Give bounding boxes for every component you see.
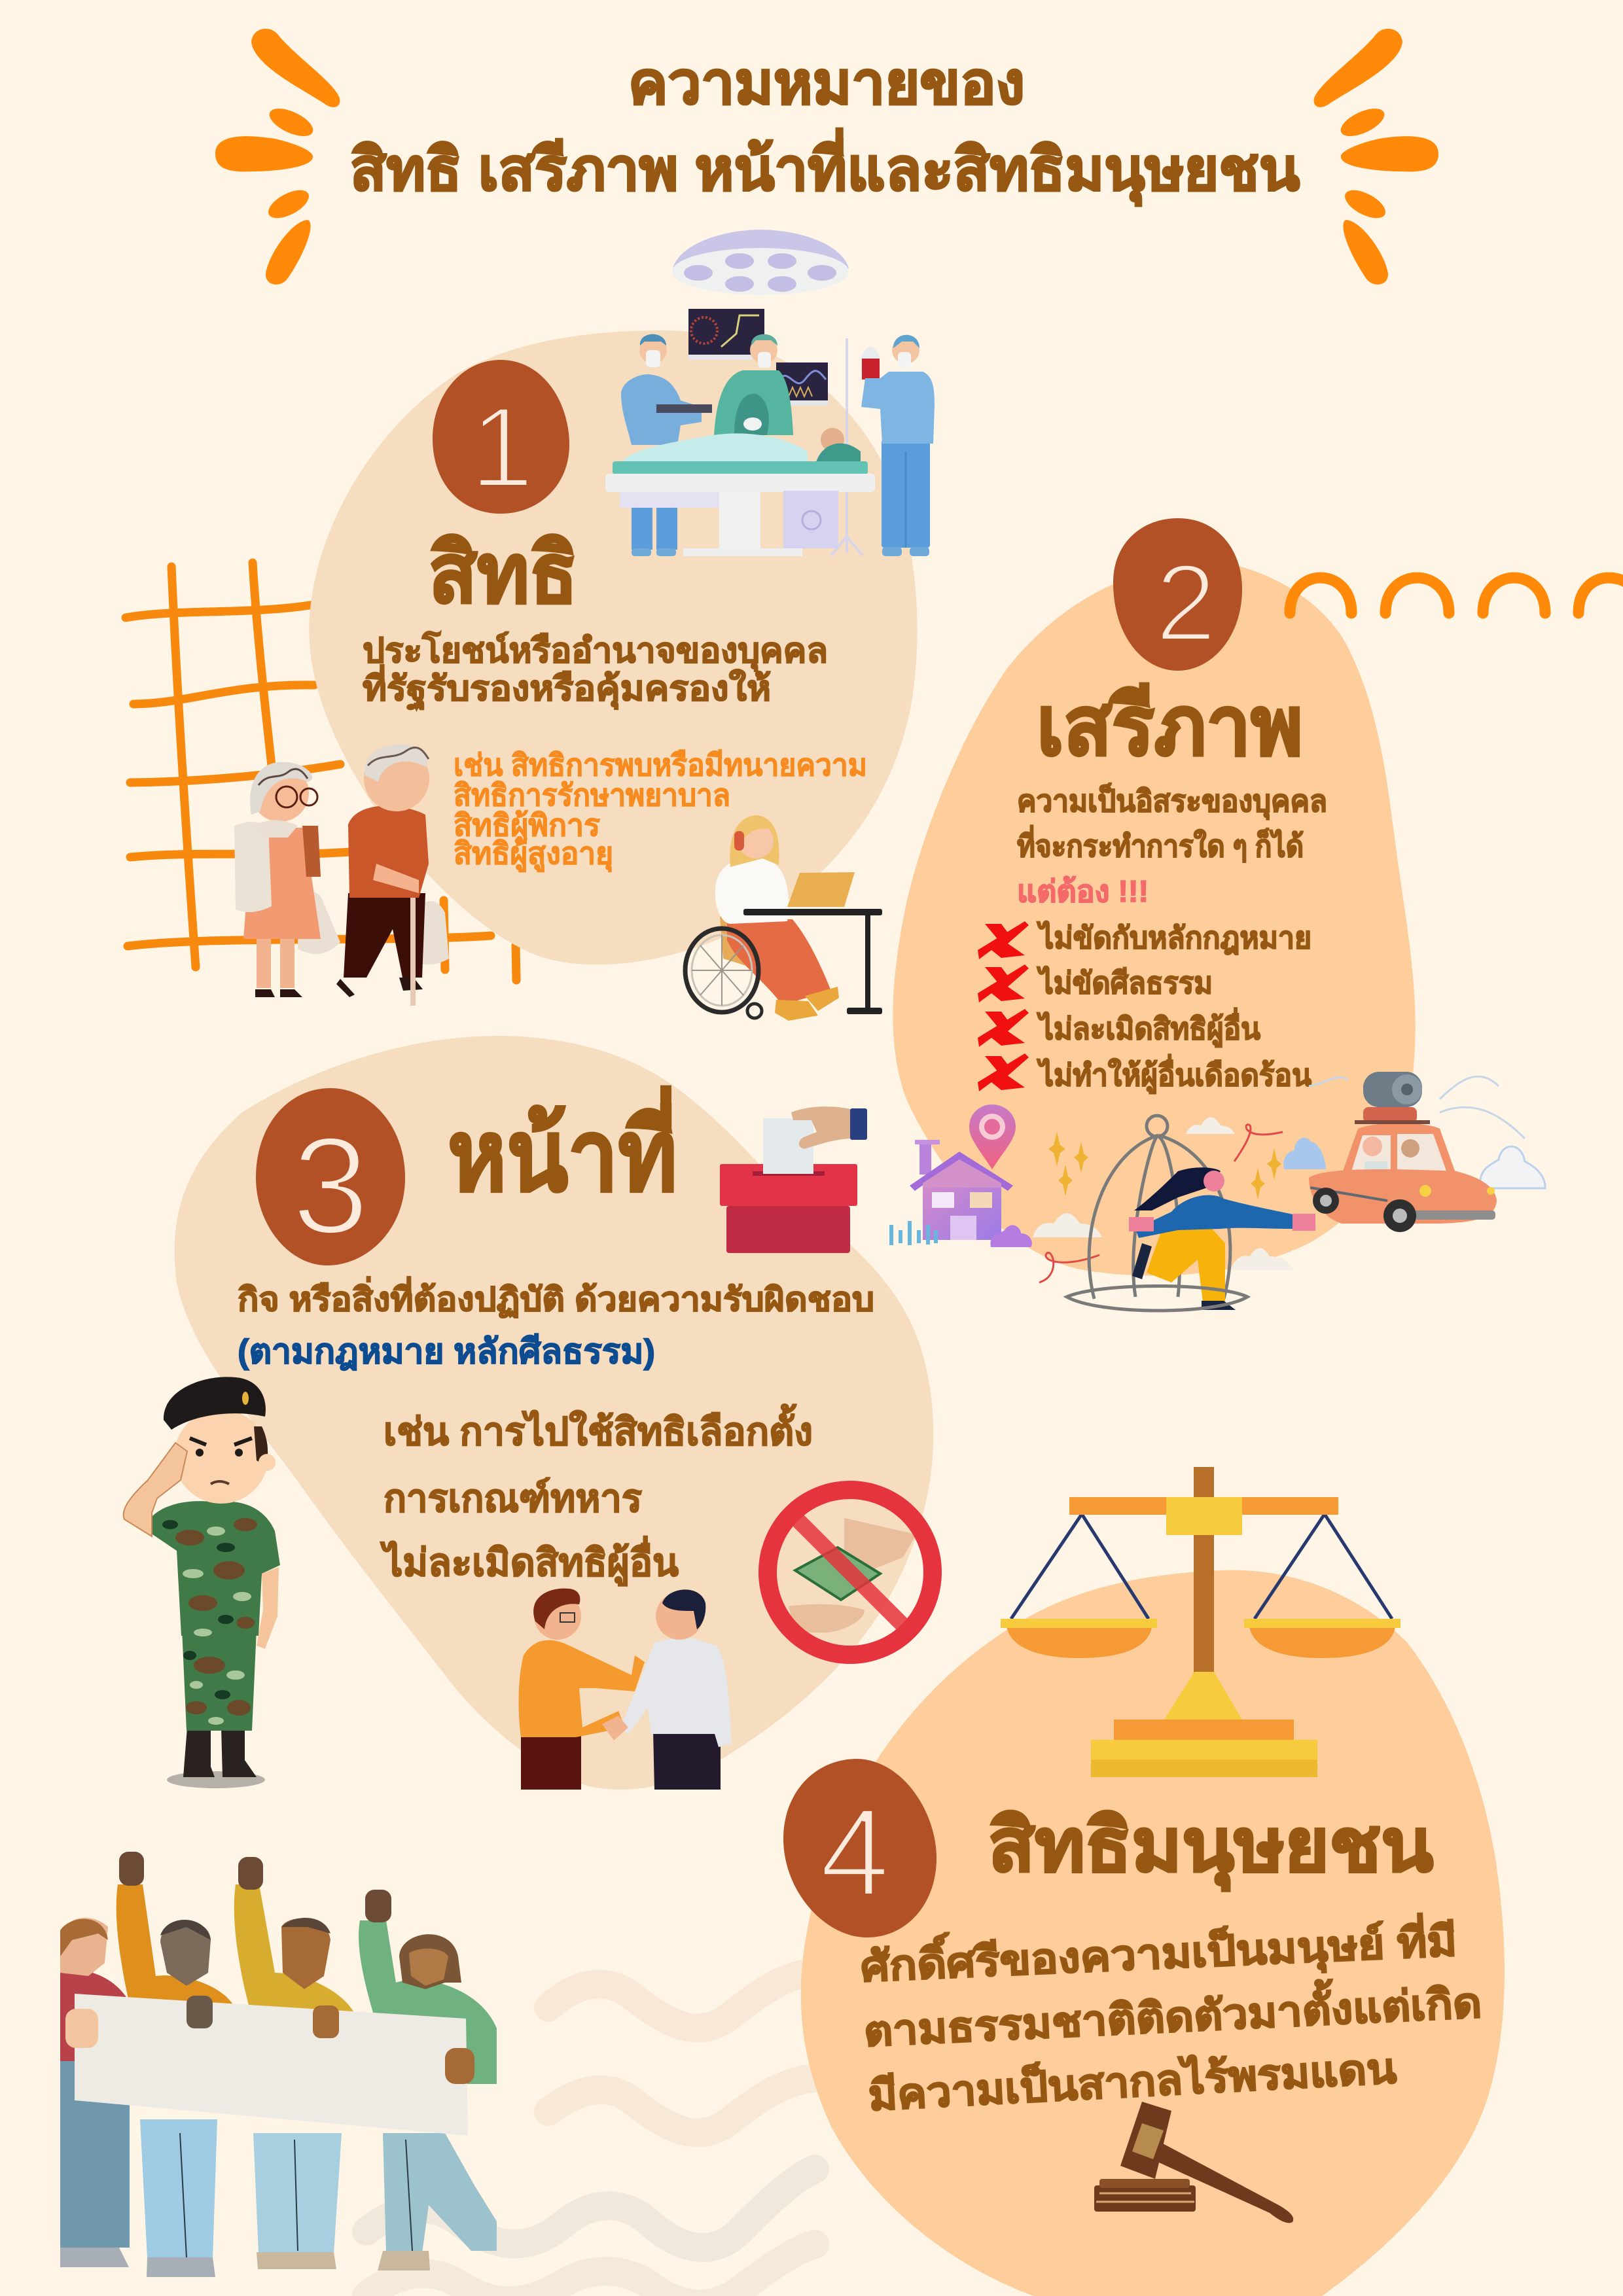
text: duty examples: [380, 1404, 813, 1586]
heading: duty: หน้าที่: [448, 1086, 677, 1212]
number badge 2: [1113, 518, 1242, 671]
number badge 1: [433, 360, 569, 514]
text: rights definition: ที่รัฐรับรองหรือคุ้มครองให้: [363, 665, 771, 711]
list: freedom limits with red crosses: [978, 921, 1312, 1094]
icon: gavel: [1094, 2102, 1293, 2223]
text: duty definition: [238, 1277, 874, 1371]
number badge 2: 2: [1155, 541, 1217, 664]
text: rights examples: [454, 748, 867, 872]
icon: orange rays right of title: [1314, 29, 1438, 285]
icon: house with location pin: [891, 1104, 1032, 1247]
text: rights definition: [363, 630, 828, 711]
icon: surgery scene: [605, 309, 935, 556]
text: human rights definition: [859, 1910, 1483, 2119]
text: duty definition: กิจ หรือสิ่งที่ต้องปฏิบัติ ด้วยความรับผิดชอบ: [238, 1277, 874, 1318]
text: human rights definition: ตามธรรมชาติติดตัวมาตั้งแต่เกิด: [863, 1972, 1483, 2055]
text: duty examples: การเกณฑ์ทหาร: [383, 1477, 642, 1520]
text: rights examples: สิทธิการรักษาพยาบาล: [454, 778, 730, 812]
heading: human rights: สิทธิมนุษยชน: [988, 1805, 1433, 1892]
panel: section 4 blob background: [801, 1570, 1505, 2296]
text: rights examples: เช่น สิทธิการพบหรือมีทนายความ: [454, 748, 867, 782]
orange grid decoration: [126, 563, 516, 980]
list: freedom limits with red crosses: ไม่ขัดศีลธรรม: [1036, 966, 1213, 1000]
scales of justice: [1001, 1467, 1400, 1777]
text: rights examples: สิทธิผู้พิการ: [454, 808, 600, 844]
title: ความหมายของ: [628, 51, 1025, 116]
heading: freedom: เสรีภาพ: [1037, 680, 1303, 772]
icon: two men shaking hands: [519, 1589, 732, 1790]
icon: red crosses: [978, 921, 1029, 1091]
text: human rights definition: ศักดิ์ศรีของความเป็นมนุษย์ ที่มี: [859, 1910, 1458, 1993]
text: duty definition: (ตามกฎหมาย หลักศีลธรรม): [238, 1333, 655, 1371]
title: [350, 51, 1300, 207]
icon: ballot box: [720, 1106, 867, 1253]
icon: saluting soldier: [124, 1377, 280, 1788]
number badge 4: 4: [820, 1782, 889, 1922]
panel: section 3 blob background: [175, 1036, 933, 1790]
icon: car with luggage: [1283, 1072, 1545, 1232]
icon: woman leaving birdcage: [1033, 1116, 1315, 1311]
number badge 3: [256, 1088, 405, 1265]
decorative orange arcs: [1290, 578, 1623, 613]
text: rights examples: สิทธิผู้สูงอายุ: [454, 836, 613, 872]
text: human rights definition: มีความเป็นสากลไร้พรมแดน: [867, 2043, 1398, 2119]
icon: no bribery sign: [768, 1490, 933, 1655]
text: freedom definition: ที่จะกระทำการใด ๆ ก็ได้: [1017, 825, 1304, 863]
number badge 1: 1: [470, 383, 534, 512]
decorative waves: [366, 1973, 818, 2296]
number badge 3: 3: [292, 1108, 369, 1263]
list: freedom limits with red crosses: ไม่ละเมิดสิทธิผู้อื่น: [1036, 1008, 1261, 1048]
text: duty examples: ไม่ละเมิดสิทธิผู้อื่น: [380, 1536, 679, 1586]
text: freedom definition: [1017, 783, 1327, 908]
title: สิทธิ เสรีภาพ หน้าที่และสิทธิมนุษยชน: [350, 128, 1300, 207]
list: freedom limits with red crosses: ไม่ขัดกับหลักกฎหมาย: [1036, 921, 1311, 955]
icon: orange rays left of title: [215, 29, 340, 285]
text: rights definition: ประโยชน์หรืออำนาจของบุคคล: [363, 630, 828, 672]
illustration: protesters with banner: [60, 1852, 497, 2277]
icon: elderly couple: [234, 745, 449, 1006]
panel: section 2 blob background: [893, 563, 1416, 1276]
list: freedom limits with red crosses: ไม่ทำให้ผู้อื่นเดือดร้อน: [1036, 1054, 1312, 1094]
text: duty examples: เช่น การไปใช้สิทธิเลือกตั้ง: [383, 1404, 813, 1453]
panel: section 1 blob background: [309, 330, 918, 964]
icon: operating lamp: [672, 230, 849, 295]
text: freedom definition: แต่ต้อง !!!: [1017, 874, 1149, 908]
number badge 4: [783, 1759, 936, 1937]
icon: woman in wheelchair: [685, 815, 882, 1021]
text: freedom definition: ความเป็นอิสระของบุคคล: [1017, 783, 1327, 820]
heading: rights: สิทธิ: [429, 527, 578, 620]
